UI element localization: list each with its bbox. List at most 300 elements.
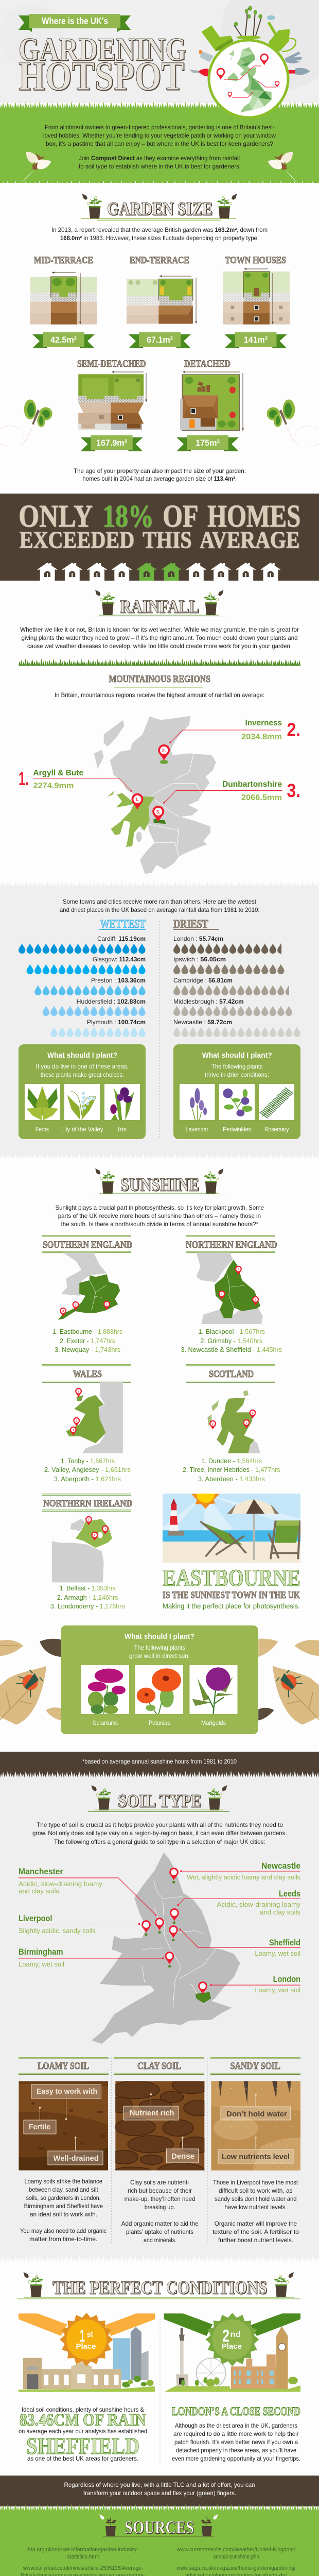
icon: iris: [110, 1087, 134, 1120]
illustration: Sheffield skyline: [19, 2313, 155, 2392]
closing message: Regardless of where you live, with a little TLC and a lot of effort, you can: [64, 2481, 255, 2488]
text: sunshine intro: the south. Is there a north/south divide in terms of annual sunshine hours?*: [61, 1221, 258, 1228]
panel: driest: [173, 918, 300, 1037]
text: sandy soil: [212, 2179, 299, 2244]
panel: southern England: 3: [62, 1310, 64, 1313]
text: soil intro: The type of soil is crucial as it helps provide your plants with all of the nutrients they need to: [37, 1821, 283, 1828]
map: Scotland rainfall: [94, 716, 216, 874]
panel: southern England: 1: [106, 1303, 108, 1306]
illustration: London skyline: [164, 2313, 300, 2392]
panel: southern England: [42, 1235, 132, 1353]
row: Cambridge: Cambridge : 56.81cm: [173, 977, 233, 984]
row: Glasgow: [27, 956, 146, 974]
heading: only 18%: ONLY: [19, 499, 93, 534]
panel: end-terrace: [127, 255, 196, 324]
panel: sun plants card: Marigolds: [201, 1719, 226, 1726]
heading: only 18%: [19, 499, 300, 553]
panel: southern England: SOUTHERN ENGLAND: [43, 1240, 132, 1250]
illustration: loamy soil: Well-drained: [54, 2154, 99, 2163]
intro text: to soil type to establish where in the UK is best for gardeners.: [79, 163, 241, 170]
text: London result: detached property in these areas, as you’ll have: [176, 2447, 296, 2454]
heading: driest: DRIEST: [173, 918, 208, 930]
callout: London: Loamy, wet soil: [255, 1986, 300, 1994]
panel: wet plants card: Lily of the Valley: [61, 1126, 103, 1133]
title: HOTSPOT: [19, 54, 184, 99]
panel: mid-terrace: [30, 255, 97, 325]
callout: Inverness: 2.: [287, 719, 300, 740]
callout: Sheffield: Loamy, wet soil: [255, 1950, 300, 1957]
text: sandy soil: further boost nutrient levels.: [218, 2236, 293, 2244]
pin: Dunbartonshire: 3.: [156, 809, 160, 815]
text: clay soil: Add organic matter to aid the: [121, 2220, 199, 2227]
callout: Newcastle: [180, 1861, 300, 1881]
panel: mid-terrace: MID-TERRACE: [34, 255, 93, 266]
text: clay soil: [121, 2179, 199, 2244]
ribbons: bottom row sizes: 175m²: [196, 438, 220, 448]
panel: Wales: WALES: [73, 1369, 102, 1380]
list: sources right: annual-sunshine.php: [213, 2554, 259, 2560]
callout: Argyll & Bute: 2274.9mm: [33, 782, 74, 790]
callout: Argyll & Bute: [19, 768, 132, 792]
text: soil intro: The following offers a general guide to soil type in a selection of major UK cities:: [54, 1838, 265, 1845]
text: property age: The age of your property can also impact the size of your garden;: [74, 467, 246, 474]
title banner: [19, 14, 131, 32]
panel: detached: DETACHED: [184, 359, 231, 369]
text: rainfall intro: cause wet weather diseases to develop, while too little could create more work for you in your garden.: [27, 642, 292, 650]
panel: second place London: [164, 2313, 300, 2462]
panel: Wales: 3: [76, 1419, 77, 1422]
text: soil intro: grow. Not only does soil type vary on a region-by-region basis, it can even differ between gardens.: [32, 1829, 287, 1837]
callout: Manchester: Acidic, slow-draining loamy: [19, 1880, 103, 1888]
text: wettest and driest intro: Some towns and cities receive more rain than others. Here are the wettest: [63, 898, 257, 905]
callout: Sheffield: [179, 1928, 300, 1957]
callout: Newcastle: Newcastle: [261, 1861, 300, 1871]
circle: [209, 40, 288, 117]
heading: sunshine: SUNSHINE: [120, 1174, 199, 1195]
callout: Birmingham: [19, 1947, 164, 1968]
panel: sandy soil: [210, 2057, 300, 2244]
text: rainfall intro: Whether we like it or not, Britain is known for its wet weather. While we may grumble, the rain is great for: [20, 626, 299, 633]
panel: town houses: TOWN HOUSES: [225, 255, 286, 266]
text: London result: [172, 2405, 300, 2462]
callout: Argyll & Bute: Argyll & Bute: [33, 769, 83, 777]
list: sources left: hta.org.uk/market-information/garden-industry-: [28, 2547, 138, 2553]
pin: Argyll: 1.: [135, 797, 139, 802]
panel: sun plants card: grow well in direct sun:: [129, 1652, 190, 1659]
icon: green butterflies: [0, 399, 319, 446]
list: sources left: [19, 2547, 146, 2576]
decoration: leaves and ladybirds: [0, 1639, 319, 1725]
ribbons: top row sizes: 42.5m²: [50, 335, 77, 345]
illustration: sandy soil: Low nutrients level: [222, 2153, 290, 2161]
heading: rainfall: RAINFALL: [120, 596, 199, 617]
panel: Wales: 2. Valley, Anglesey - 1,651hrs: [44, 1466, 131, 1473]
heading: wettest: WETTEST: [100, 918, 146, 930]
panel: southern England: 3. Newquay - 1,743hrs: [55, 1346, 120, 1353]
text: Sheffield result: Ideal soil conditions, plenty of sunshine hours &: [22, 2406, 144, 2413]
callout: Argyll & Bute: 1.: [19, 768, 29, 789]
text: sandy soil: have low nutrient levels.: [224, 2204, 287, 2211]
text: rainfall intro: [20, 626, 299, 650]
panel: wet plants card: If you do live in one of these areas,: [36, 1063, 129, 1070]
heading: the perfect conditions: [17, 2272, 300, 2299]
sun: [191, 1494, 220, 1509]
icon: periwinkles: [223, 1089, 253, 1116]
panel: town houses: [223, 255, 290, 325]
text: property age: homes built in 2004 had an average garden size of 113.4m².: [82, 475, 237, 482]
badge: 2nd place: Place: [222, 2342, 242, 2351]
text: loamy soil: an ideal soil to work with.: [30, 2211, 97, 2218]
intro text: box, it’s a pastime that all can enjoy – but where in the UK is best for keen gardeners?: [46, 140, 273, 147]
ribbons: top row sizes: 141m²: [244, 335, 268, 345]
ribbon: [19, 2313, 155, 2336]
panel: Scotland: [183, 1364, 280, 1483]
icon: rosemary: [262, 1090, 290, 1116]
panel: Scotland: 2. Tiree, Inner Hebrides - 1,477hrs: [183, 1466, 280, 1473]
callout: Dunbartonshire: 3.: [287, 780, 300, 801]
closing message: transform your outdoor space and flex your (green) fingers.: [83, 2489, 236, 2497]
text: Sheffield result: SHEFFIELD: [26, 2433, 139, 2459]
panel: Northern Ireland: 3. Londonderry - 1,176hrs: [50, 1602, 125, 1610]
callout: Leeds: [177, 1889, 301, 1916]
text: garden size intro: 168.0m² in 1983. However, these sizes fluctuate depending on property type:: [60, 234, 259, 242]
closing message: [64, 2481, 255, 2497]
text: London result: even more gardening opportunity at your fingertips.: [172, 2455, 300, 2462]
heading: the perfect conditions: THE PERFECT CONDITIONS: [52, 2277, 267, 2298]
text: loamy soil: soils, so gardeners in London,: [26, 2194, 101, 2201]
row: Cambridge: [173, 977, 292, 995]
panel: loamy soil: LOAMY SOIL: [38, 2061, 89, 2072]
panel: dry plants card: The following plants: [211, 1063, 262, 1070]
panel: Wales: 3. Aberporth - 1,621hrs: [54, 1475, 121, 1483]
text: sandy soil: sandy soils don’t hold water and: [215, 2195, 296, 2202]
panel: wet plants card: these plants make great choices:: [41, 1071, 124, 1078]
text: property age: [74, 467, 246, 482]
text: clay soil: breaking up.: [145, 2204, 175, 2211]
list: sources right: www.currentresults.com/Weather/United-Kingdom/: [176, 2547, 296, 2553]
callout: Dunbartonshire: [163, 780, 300, 804]
ladybird left: [22, 1674, 38, 1690]
callout: London: London: [273, 1975, 300, 1984]
text: sandy soil: Those in Liverpool have the most: [213, 2179, 298, 2186]
callout: Inverness: 2034.8mm: [241, 733, 282, 741]
ribbons: bottom row sizes: 167.9m²: [96, 438, 127, 448]
panel: Scotland: 1: [246, 1421, 247, 1425]
panel: loamy soil: [19, 2057, 109, 2243]
text: sandy soil: difficult soil to work with, as: [219, 2187, 293, 2194]
row: Middlesbrough: [173, 998, 292, 1016]
row: Ipswich: Ipswich : 56.05cm: [173, 956, 226, 963]
umbrella: [253, 1514, 255, 1560]
text: Sheffield result: as one of the best UK areas for gardeners.: [27, 2455, 138, 2462]
panel: semi-detached: [77, 359, 146, 430]
heading: only 18%: THIS: [143, 527, 191, 553]
text: loamy soil: between clay, sand and silt: [29, 2186, 98, 2193]
icon: moths: [22, 152, 297, 182]
list: sources left: statistics.html: [67, 2554, 99, 2560]
panel: wet plants card: Ferns: [36, 1126, 49, 1133]
pin: Inverness: [158, 744, 170, 761]
callout: Inverness: Inverness: [245, 719, 282, 727]
heading: sources: SOURCES: [125, 2517, 194, 2537]
panel: dry plants card: [173, 1044, 300, 1139]
panel: Northern Ireland: 2. Armagh - 1,246hrs: [57, 1594, 118, 1601]
ribbons: bottom row sizes: [81, 435, 239, 451]
illustration: clay soil: Nutrient rich: [130, 2109, 174, 2117]
panel: Scotland: SCOTLAND: [209, 1369, 254, 1380]
row: Huddersfield: Huddersfield : 102.83cm: [77, 998, 146, 1005]
panel: dry plants card: Periwinkles: [223, 1126, 251, 1133]
panel: dry plants card: Rosemary: [264, 1126, 289, 1133]
badge: 1st place: 1: [80, 2326, 85, 2345]
badge: 2nd place: 2: [222, 2326, 229, 2345]
text: sunshine intro: parts of the UK receive more hours of sunshine than others – namely those in: [58, 1212, 261, 1219]
heading: sunshine: [93, 1168, 225, 1195]
panel: Wales: 1. Tenby - 1,667hrs: [61, 1457, 115, 1465]
heading: mountainous regions: MOUNTAINOUS REGIONS: [109, 674, 210, 685]
callout: Leeds: Acidic, slow-draining loamy: [217, 1901, 301, 1908]
panel: northern England: NORTHERN ENGLAND: [186, 1240, 277, 1250]
row: Newcastle: [173, 1019, 300, 1037]
panel: semi-detached: SEMI-DETACHED: [77, 359, 146, 369]
panel: wet plants card: What should I plant?: [47, 1051, 117, 1060]
panel: detached: [180, 359, 243, 431]
text: rainfall intro: giving plants the water they need to grow – if it’s the right amount. Too much could drown your plants and: [22, 634, 297, 641]
row: Cardiff: [19, 935, 146, 954]
panel: sandy soil: SANDY SOIL: [231, 2061, 280, 2072]
callout: Newcastle: Wet, slightly acidic loamy and clay soils: [187, 1873, 300, 1881]
panel: northern England: 1. Blackpool - 1,567hrs: [199, 1328, 265, 1335]
callout: Eastbourne: [163, 1565, 300, 1610]
text: sandy soil: Organic matter will improve the: [215, 2220, 297, 2227]
illustration: sandy soil: [211, 2081, 300, 2171]
panel: sun plants card: What should I plant?: [125, 1632, 194, 1641]
panel: northern England: 3: [238, 1268, 239, 1271]
row: Middlesbrough: Middlesbrough : 57.42cm: [173, 998, 244, 1005]
callout: Manchester: and clay soils: [19, 1887, 59, 1895]
heading: only 18%: EXCEEDED: [20, 527, 134, 553]
badge: 2nd place: nd: [231, 2330, 241, 2339]
text: loamy soil: Loamy soils strike the balance: [24, 2178, 102, 2185]
heading: garden size: GARDEN SIZE: [107, 198, 212, 219]
text: loamy soil: matter from time-to-time.: [29, 2235, 97, 2243]
panel: sun plants card: Petunias: [149, 1719, 170, 1726]
panel: Northern Ireland: NORTHERN IRELAND: [43, 1498, 132, 1509]
text: garden size intro: [51, 226, 268, 242]
intro text: [43, 124, 276, 170]
row: London: [173, 935, 285, 954]
panel: dry plants card: thrive in drier conditions:: [205, 1071, 269, 1078]
text: London result: are required to do a little more work to help their: [173, 2430, 299, 2437]
heading: soil type: [88, 1785, 229, 1812]
badge: garden tools and UK map: [189, 6, 310, 117]
panel: 18 percent banner: [0, 494, 319, 581]
row: London: London : 55.74cm: [173, 935, 223, 942]
callout: Dunbartonshire: 2066.5mm: [241, 793, 282, 802]
text: clay soil: and minerals.: [144, 2236, 176, 2244]
text: sandy soil: texture of the soil. A fertiliser to: [212, 2228, 299, 2235]
badge: 1st place: Place: [76, 2342, 96, 2351]
callout: Birmingham: Loamy, wet soil: [19, 1960, 64, 1968]
heading: sources: [99, 2514, 218, 2537]
list: sources right: www.saga.co.uk/magazine/home-garden/gardening/: [176, 2565, 296, 2571]
pins: [217, 54, 279, 98]
panel: Scotland: 3. Aberdeen - 1,433hrs: [198, 1475, 265, 1483]
panel: Wales: 2: [78, 1390, 79, 1393]
callout: Dunbartonshire: Dunbartonshire: [222, 780, 282, 789]
ladybird right: [281, 1674, 296, 1690]
icon: petunias: [137, 1668, 181, 1714]
text: sunshine intro: [56, 1204, 264, 1228]
panel: northern England: 1: [221, 1293, 223, 1296]
intro text: loved hobbies. Whether you’re tending to your vegetable patch or working on your window: [43, 132, 276, 139]
icon: marigolds: [192, 1667, 234, 1714]
callout: London: [210, 1975, 300, 1994]
panel: Northern Ireland: 1. Belfast - 1,353hrs: [60, 1584, 116, 1592]
text: wettest and driest intro: and driest places in the UK based on average rainfall data from 1981 to 2010:: [60, 906, 259, 913]
panel: dry plants card: Lavender: [186, 1126, 208, 1133]
icon: tools: [189, 6, 310, 76]
row: Huddersfield: [43, 998, 146, 1016]
panel: Wales: 1: [73, 1429, 74, 1432]
panel: wettest: [19, 918, 146, 1037]
panel: clay soil: [114, 2057, 205, 2242]
panel: sun plants card: The following plants: [134, 1644, 185, 1651]
panel: southern England: 1. Eastbourne - 1,888hrs: [52, 1328, 122, 1335]
heading: only 18%: OF: [163, 499, 199, 534]
pin: Inverness: 2.: [162, 748, 166, 753]
row: Preston: Preston : 103.36cm: [91, 977, 146, 984]
badge: 1st place: [60, 2313, 113, 2366]
pin: Argyll: [132, 793, 143, 810]
panel: southern England: 2: [75, 1303, 77, 1307]
intro text: Join Compost Direct as they examine everything from rainfall: [79, 155, 240, 162]
icon: ferns: [26, 1087, 58, 1120]
title: GARDENING: [19, 31, 186, 67]
text: sunshine intro: Sunlight plays a crucial part in photosynthesis, so it’s key for plant growth. Some: [56, 1204, 264, 1211]
text: wettest and driest intro: [60, 898, 259, 913]
row: Newcastle: Newcastle : 59.72cm: [173, 1019, 232, 1026]
text: loamy soil: [20, 2178, 107, 2243]
illustration: sandy soil: Don’t hold water: [226, 2110, 287, 2119]
text: clay soil: make-up, they’ll often need: [125, 2195, 196, 2202]
row: Glasgow: Glasgow: 112.43cm: [93, 956, 146, 963]
list: sources right: [171, 2547, 300, 2576]
text: Sheffield result: on average each year our analysis has established: [19, 2428, 147, 2435]
heading: soil type: SOIL TYPE: [118, 1791, 202, 1811]
panel: Scotland: 3: [252, 1412, 254, 1415]
text: garden size intro: In 2013, a report revealed that the average British garden was 163.2m², down from: [51, 226, 268, 233]
callout: Eastbourne: Making it the perfect place for photosynthesis.: [163, 1602, 300, 1610]
badge: 2nd place: [206, 2313, 259, 2366]
text: London result: Although as the driest area in the UK, gardeners: [175, 2422, 297, 2429]
callout: Manchester: Manchester: [19, 1867, 63, 1876]
heading: rainfall: [93, 590, 225, 617]
panel: Northern Ireland: 2: [94, 1534, 96, 1537]
text: clay soil: rich but because of their: [128, 2187, 192, 2194]
callout: Liverpool: Liverpool: [19, 1914, 52, 1923]
badge: 1st place: st: [87, 2330, 94, 2339]
panel: northern England: 2: [255, 1298, 256, 1301]
text: mountainous intro: In Britain, mountainous regions receive the highest amount of rainfall on average:: [55, 691, 264, 699]
illustration: loamy soil: Easy to work with: [37, 2087, 97, 2096]
text: clay soil: Clay soils are nutrient-: [130, 2179, 189, 2186]
heading: only 18%: AVERAGE: [200, 527, 299, 553]
icon: geraniums: [88, 1669, 126, 1714]
panel: Scotland: 2: [212, 1422, 214, 1426]
callout: Leeds: and clay soils: [260, 1908, 300, 1916]
row: Cardiff: Cardiff: 115.19cm: [97, 935, 146, 942]
panel: Northern Ireland: 1: [104, 1528, 106, 1531]
illustration: loamy soil: [19, 2081, 108, 2171]
panel: sun plants card: [61, 1625, 258, 1734]
ribbons: top row sizes: 67.1m²: [147, 335, 173, 345]
heading: only 18%: 18%: [102, 499, 153, 534]
callout: Liverpool: Slightly acidic, sandy soils: [19, 1927, 96, 1935]
ribbons: top row sizes: [32, 332, 287, 348]
panel: Scotland: 1. Dundee - 1,564hrs: [201, 1457, 262, 1465]
panel: clay soil: CLAY SOIL: [137, 2061, 181, 2072]
illustration: clay soil: Dense: [171, 2152, 194, 2161]
row: Plymouth: Plymouth : 100.74cm: [87, 1019, 146, 1026]
panel: Wales: [42, 1364, 131, 1483]
chairs: [203, 1522, 242, 1545]
callout: Inverness: [169, 719, 300, 743]
title banner: Where is the UK's: [42, 16, 108, 26]
icon: lily of the valley: [67, 1092, 97, 1120]
footnote: *based on average annual sunshine hours from 1981 to 2010: [82, 1758, 237, 1765]
callout: Sheffield: Sheffield: [269, 1938, 300, 1947]
title: [19, 31, 186, 99]
intro text: From allotment owners to green-fingered professionals, gardening is one of Britain’s best-: [45, 124, 275, 131]
grass strip: [19, 658, 300, 666]
illustration: Eastbourne beach: [163, 1494, 300, 1563]
illustration: loamy soil: Fertile: [29, 2123, 50, 2131]
text: clay soil: plants’ uptake of nutrients: [126, 2228, 193, 2235]
illustration: clay soil: [115, 2081, 205, 2171]
panel: dry plants card: What should I plant?: [202, 1051, 272, 1060]
map: England and Wales soil: [92, 1853, 240, 2044]
panel: northern England: 3. Newcastle & Sheffield - 1,445hrs: [181, 1346, 282, 1353]
panel: northern England: 2. Grimsby - 1,540hrs: [201, 1337, 262, 1345]
callout: Leeds: Leeds: [279, 1889, 300, 1899]
panel: sun plants card: Geraniums: [93, 1719, 118, 1726]
panel: end-terrace: END-TERRACE: [130, 255, 189, 266]
row: Plymouth: [50, 1019, 146, 1037]
pin: Dunbartonshire: [152, 806, 164, 822]
icons: ten houses: [38, 563, 280, 581]
icon: lavender: [190, 1088, 207, 1120]
panel: Northern Ireland: [42, 1494, 132, 1610]
text: loamy soil: Birmingham and Sheffield have: [24, 2202, 103, 2210]
panel: first place Sheffield: [19, 2313, 155, 2462]
text: soil intro: [32, 1821, 287, 1845]
list: sources left: www.dailymail.co.uk/news/article-2535136/Average-: [23, 2565, 143, 2571]
map: low-poly UK: [227, 47, 272, 112]
text: loamy soil: You may also need to add organic: [20, 2227, 107, 2234]
callout: Birmingham: Birmingham: [19, 1947, 63, 1957]
heading: garden size: [81, 194, 237, 221]
callout: Liverpool: [19, 1914, 140, 1935]
text: London result: patch flourish. It’s even better news if you own a: [174, 2438, 298, 2446]
panel: wet plants card: Iris: [118, 1126, 127, 1133]
text: Sheffield result: [19, 2406, 147, 2462]
row: Preston: [34, 977, 146, 995]
text: Sheffield result: 83.46CM OF RAIN: [20, 2411, 146, 2430]
row: Ipswich: [173, 956, 285, 974]
panel: northern England: [181, 1235, 282, 1353]
panel: southern England: 2. Exeter - 1,747hrs: [60, 1337, 115, 1345]
